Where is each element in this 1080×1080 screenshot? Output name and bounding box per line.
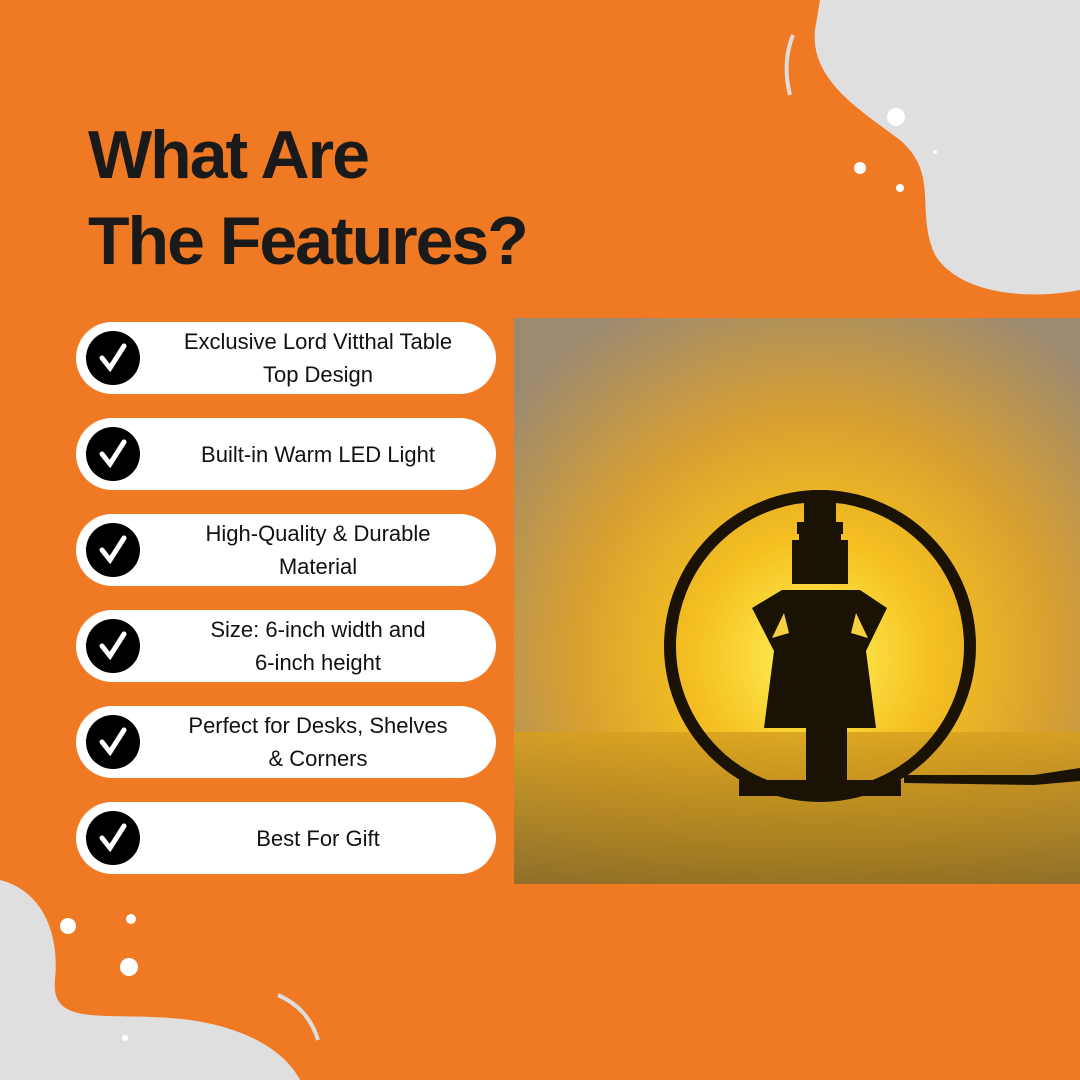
- title: [88, 117, 527, 279]
- feature 1: Top Design: [263, 362, 373, 387]
- feature 6: [76, 802, 496, 874]
- feature 5: [76, 706, 496, 778]
- feature 4: [76, 610, 496, 682]
- feature 5: & Corners: [268, 746, 368, 771]
- title: What Are: [88, 117, 368, 193]
- product photo: [514, 318, 1080, 884]
- feature 2: [76, 418, 496, 490]
- feature list: [76, 322, 496, 874]
- feature 1: Exclusive Lord Vitthal Table: [184, 329, 452, 354]
- feature 1: [76, 322, 496, 394]
- title: The Features?: [88, 203, 527, 279]
- feature 3: High-Quality & Durable: [206, 521, 430, 546]
- feature 6: Best For Gift: [256, 826, 380, 850]
- feature 4: 6-inch height: [255, 650, 381, 675]
- feature 3: Material: [279, 554, 357, 579]
- feature 5: Perfect for Desks, Shelves: [188, 713, 448, 738]
- feature 2: Built-in Warm LED Light: [201, 442, 435, 466]
- feature 4: Size: 6-inch width and: [210, 617, 426, 642]
- feature 3: [76, 514, 496, 586]
